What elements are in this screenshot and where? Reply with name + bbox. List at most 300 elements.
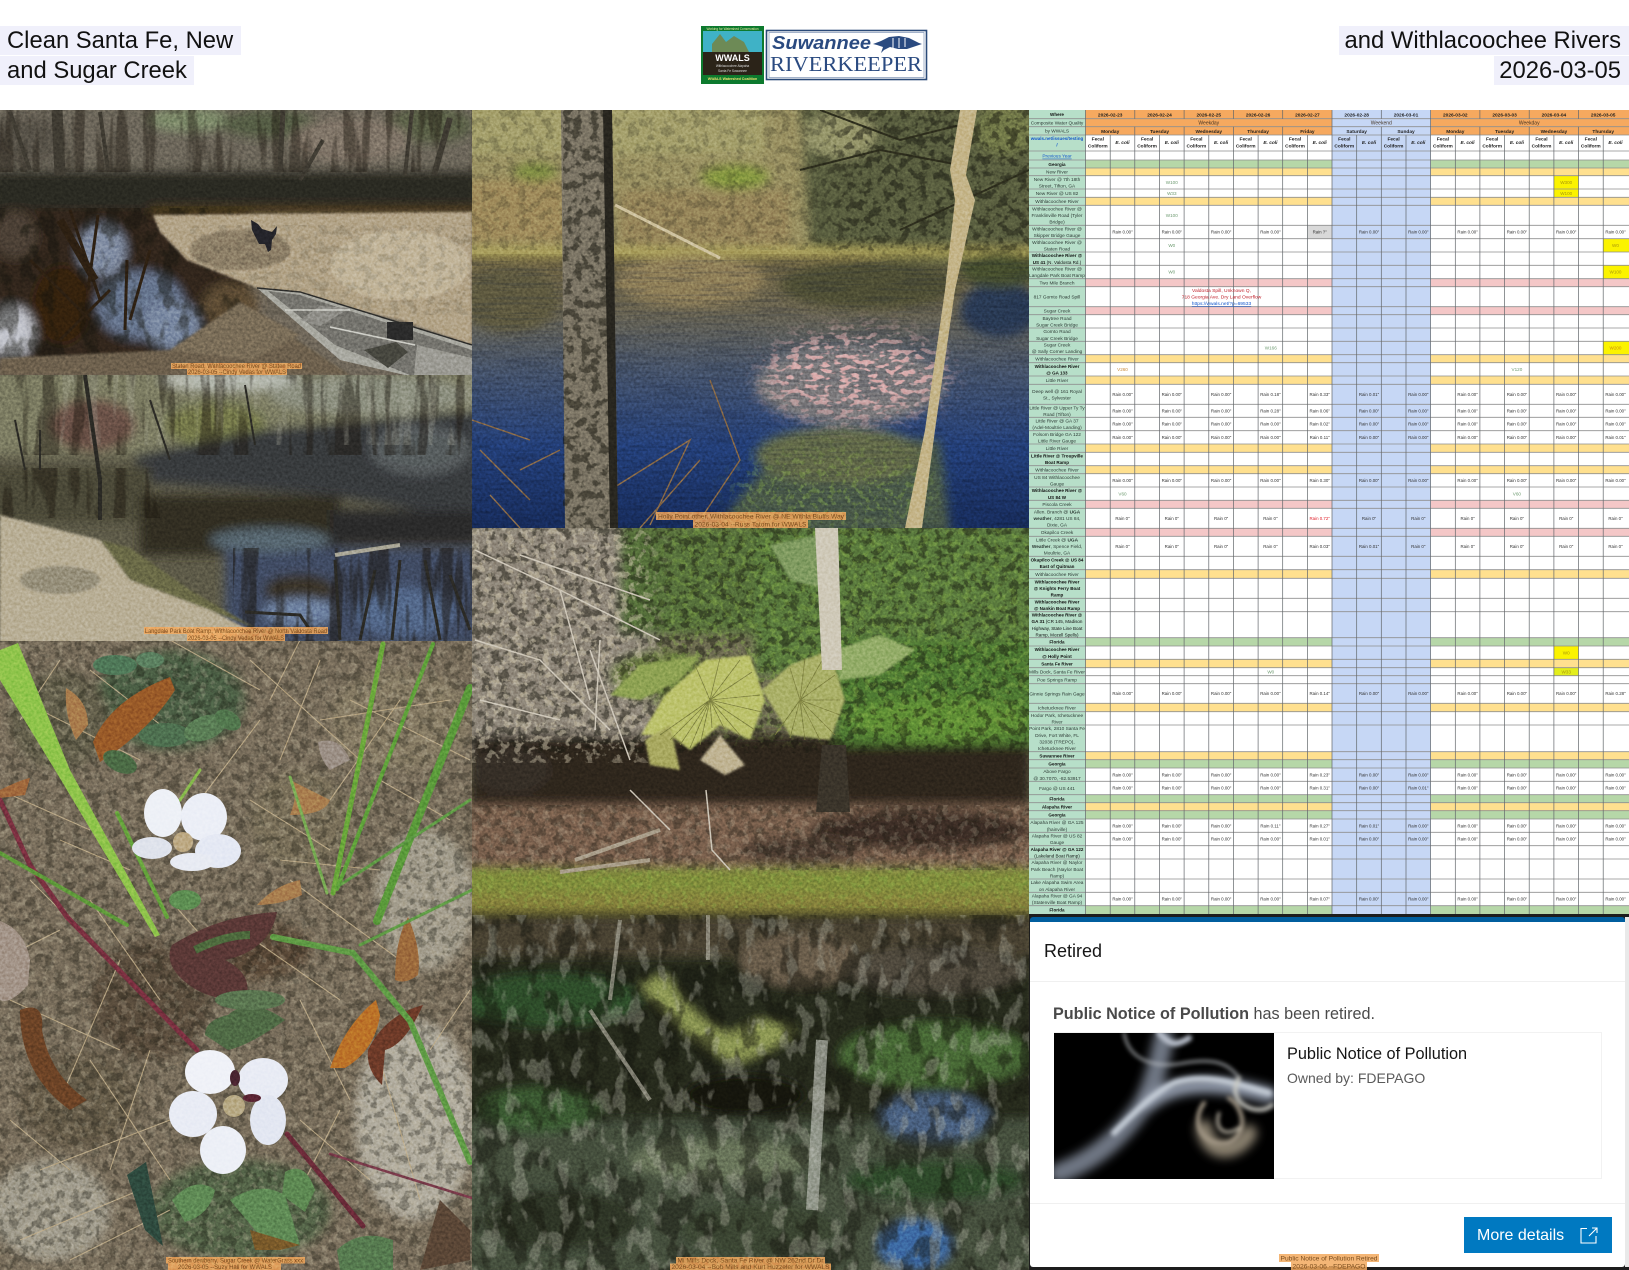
table rain readings: Rain 0.00" <box>1457 408 1478 413</box>
table header: Fecal <box>1585 137 1597 142</box>
table rain readings: Rain 0.00" <box>1605 230 1626 235</box>
header: left title: Clean Santa Fe, New <box>7 27 233 54</box>
table rain readings: Rain 0.00" <box>1112 786 1133 791</box>
table rain readings: Rain 0.00" <box>1211 691 1232 696</box>
caption: Public Notice of Pollution Retired <box>1279 1254 1379 1270</box>
table rain readings: Rain 0.00" <box>1556 422 1577 427</box>
table header: E. coli <box>1510 140 1525 146</box>
table water-quality values: W200 <box>1609 346 1622 351</box>
table site labels: Withlacoochee River <box>1035 356 1079 362</box>
table header: Fecal <box>1190 137 1203 142</box>
button: More details <box>1464 1217 1612 1253</box>
table rain readings: Rain 0.00" <box>1162 823 1182 828</box>
table rain readings: Rain 0.31" <box>1310 786 1330 791</box>
table rain readings: Rain 0.01" <box>1310 837 1330 842</box>
table rain readings: Rain 0.00" <box>1605 786 1626 791</box>
table site labels: Deep well @ 161 Royal <box>1032 390 1082 395</box>
table rain readings: Rain 0.00" <box>1260 897 1281 902</box>
table site labels: Sugar Creek Bridge <box>1036 336 1078 342</box>
table site labels: Santa Fe River <box>1041 661 1073 666</box>
table header: Weekday <box>1198 120 1220 126</box>
table rain readings: Rain 0.00" <box>1112 408 1133 413</box>
table rain readings: Rain 0.00" <box>1507 772 1528 777</box>
table rain readings: Rain 0.00" <box>1556 691 1577 696</box>
table rain readings: Rain 0.00" <box>1211 786 1232 791</box>
table site labels: Withlacoochee River @ <box>1032 268 1082 272</box>
logo: Suwannee Riverkeeper <box>766 30 926 80</box>
table rain readings: Rain 0.00" <box>1112 422 1133 427</box>
table rain readings: Rain 0.00" <box>1605 408 1626 413</box>
table site labels: Withlacoochee River @ <box>1032 228 1082 232</box>
table header: Thursday <box>1592 129 1614 135</box>
table header: Fecal <box>1338 137 1350 142</box>
table site labels: Withlacoochee River <box>1035 647 1079 652</box>
table header: E. coli <box>1411 140 1426 146</box>
table rain readings: Rain 0.00" <box>1556 230 1577 235</box>
table header: Fecal <box>1387 137 1400 142</box>
table rain readings: Rain ?" <box>1313 230 1327 235</box>
table site labels: US 84 W <box>1048 495 1067 500</box>
table header: Coliform <box>1187 143 1206 149</box>
table rain readings: Rain 0.00" <box>1162 478 1182 483</box>
button: More details: More details <box>1477 1227 1564 1244</box>
table site labels: Withlacoochee River <box>1035 199 1079 205</box>
table rain readings: Rain 0" <box>1608 516 1623 521</box>
table bands <box>1086 160 1629 914</box>
table rain readings: Rain 0.00" <box>1408 435 1429 440</box>
header: left title <box>0 26 241 85</box>
table site labels: Little River <box>1046 378 1069 384</box>
table rain readings: Rain 0.00" <box>1457 230 1478 235</box>
table site labels: Ichetucknee River <box>1038 705 1076 711</box>
table header: 2026-03-04 <box>1542 112 1566 118</box>
logo: WWALS: WWALS <box>715 53 750 63</box>
table rain readings: Rain 0.00" <box>1408 408 1429 413</box>
table site labels: weather, 4281 US 84, <box>1033 517 1081 522</box>
table rain readings: Rain 0.00" <box>1507 478 1528 483</box>
table rain readings: Rain 0.01" <box>1605 435 1626 440</box>
photo: Staten Road river bend with dog and canoe <box>0 105 480 375</box>
table rain readings: Rain 0.00" <box>1507 408 1528 413</box>
table header: Coliform <box>1482 143 1502 149</box>
table site labels: Park Beach (Naylor Boat <box>1031 867 1084 873</box>
caption: Staten Road <box>171 363 302 376</box>
table rain readings: Rain 0.28" <box>1260 408 1281 413</box>
litter texture <box>0 641 472 1270</box>
table header: Sunday <box>1397 129 1415 135</box>
table site labels: @ GA 133 <box>1046 371 1068 376</box>
table site labels: Ramp, Mozell Spells) <box>1036 633 1079 638</box>
table header: Coliform <box>1236 143 1256 149</box>
table site labels: Boat Ramp <box>1045 460 1069 465</box>
table header: E. coli <box>1313 140 1327 146</box>
table site labels: Ichetucknee River <box>1038 746 1076 752</box>
table rain readings: Rain 0.00" <box>1359 230 1380 235</box>
table site labels: Withlacoochee River @ <box>1032 612 1082 618</box>
table rain readings: Rain 0.00" <box>1556 897 1577 902</box>
table spill note: 718 Georgia Ave. Dry Land Overflow <box>1182 294 1262 300</box>
table rain readings: Rain 0.00" <box>1260 230 1281 235</box>
caption: Staten Road: 2026-03-05 --Cindy Vedas for WWALS <box>188 369 286 376</box>
table water-quality values: V260 <box>1117 367 1128 372</box>
photo: Langdale Park Boat Ramp <box>0 370 480 648</box>
table rain readings: Rain 0" <box>1165 516 1179 521</box>
table rain readings: Rain 0.00" <box>1408 691 1429 696</box>
logo: Suwannee Riverkeeper: RIVERKEEPER <box>770 52 922 76</box>
caption: Mills Dock: Mi Mills Dock, Santa Fe River @ NW 262nd Dr Dr <box>678 1258 824 1265</box>
table header: Fecal <box>1240 137 1252 142</box>
table header: Coliform <box>1384 143 1403 149</box>
table rain readings: Rain 0.00" <box>1162 772 1182 777</box>
panel: Retired notice modal <box>1029 914 1629 1270</box>
table site labels: Suwannee River <box>1039 754 1075 758</box>
table site labels: Little River @ GA 37 <box>1035 420 1079 424</box>
flower: lower <box>169 1050 288 1174</box>
card owner: Owned by: FDEPAGO <box>1287 1070 1425 1086</box>
table rain readings: Rain 0.07" <box>1310 897 1330 902</box>
pine needles <box>0 640 470 1260</box>
table site labels: New River @ US 82 <box>1036 191 1079 197</box>
table rain readings: Rain 0.00" <box>1556 837 1577 842</box>
table rain readings: Rain 0.00" <box>1211 772 1232 777</box>
table site labels: Little River @ Troupville <box>1031 454 1083 458</box>
table rain readings: Rain 0.00" <box>1162 392 1182 397</box>
table site labels: Little River <box>1046 446 1069 452</box>
photo: Southern dewberry flowers <box>0 640 475 1270</box>
header: right title: 2026-03-05 <box>1499 57 1621 84</box>
table water-quality values: W0 <box>1612 243 1619 248</box>
table site labels: River <box>1051 720 1063 726</box>
table header: wwals.net/issues/testing <box>1031 136 1083 141</box>
header: left title: and Sugar Creek <box>7 57 187 84</box>
table rain readings: Rain 0.00" <box>1408 837 1429 842</box>
table site labels: Franklinville Road (Tyler <box>1032 213 1083 219</box>
table rain readings: Rain 0.00" <box>1457 823 1478 828</box>
table spill note: https://wwals.net/?p=69533 <box>1192 301 1251 307</box>
table rain readings: Rain 0.00" <box>1162 408 1182 413</box>
logo: WWALS: Working for Watershed Conservation <box>706 27 759 31</box>
table site labels: (Adel-Moultrie Landing) <box>1032 425 1082 431</box>
table site labels: (hainville) <box>1047 827 1068 833</box>
table rain readings: Rain 0.00" <box>1507 823 1528 828</box>
table site labels: Mills Dock, Santa Fe River <box>1029 670 1085 676</box>
table site labels: Two Mile Branch <box>1039 280 1075 286</box>
table header: Weekday <box>1519 120 1540 126</box>
table header: Coliform <box>1137 143 1157 149</box>
table site labels: Street, Tifton, GA <box>1039 184 1076 190</box>
table rain readings: Rain 0.00" <box>1260 837 1281 842</box>
table header: E. coli <box>1263 140 1278 146</box>
table site labels: Allen. Branch @ UGA <box>1034 510 1080 515</box>
table rain readings: Rain 0.00" <box>1211 230 1232 235</box>
water quality table <box>1029 110 1629 915</box>
table rain readings: Rain 0.00" <box>1211 408 1232 413</box>
table header: E. coli <box>1115 140 1130 146</box>
table site labels: Baytree Road <box>1042 317 1072 322</box>
table site labels: Alapaha River @ Naylor <box>1031 861 1083 866</box>
table rain readings: Rain 0.00" <box>1359 478 1380 483</box>
caption: Holly Point: Holly Point other, Withlacoochee River @ NE Withla Bluffs Way <box>658 513 845 520</box>
table header: Previous Year <box>1042 154 1072 160</box>
table water-quality values: W33 <box>1561 669 1571 674</box>
table rain readings: Rain 0.00" <box>1359 897 1380 902</box>
table rain readings: Rain 0.00" <box>1507 230 1528 235</box>
table rain readings: Rain 0.11" <box>1310 435 1330 440</box>
palm fronds <box>610 535 915 775</box>
caption: Holly Point: 2026-03-04 --Russ Tatom for WWALS <box>694 521 806 528</box>
table site labels: Withlacoochee River <box>1035 468 1079 474</box>
table site labels: Drive, Fort White, FL <box>1035 733 1079 739</box>
table header: 2026-02-28 <box>1344 112 1369 118</box>
table rain readings: Rain 0.00" <box>1162 422 1182 427</box>
table header: Fecal <box>1535 137 1548 142</box>
table rain readings: Rain 0.00" <box>1457 392 1478 397</box>
logo: WWALS: Withlacoochee Alapaha <box>716 64 749 68</box>
card thumbnail: smoke <box>1054 1033 1274 1179</box>
table rain readings: Rain 0" <box>1115 544 1130 549</box>
table site labels: East of Quitman <box>1040 564 1075 569</box>
table rain readings: Rain 0.00" <box>1260 691 1281 696</box>
table site labels: @ Nankin Boat Ramp <box>1034 606 1080 611</box>
table rain readings: Rain 0.00" <box>1359 408 1380 413</box>
table header: Fecal <box>1141 137 1153 142</box>
table site labels: Road (Tifton) <box>1043 412 1071 418</box>
table site labels: Alapaha River @ GA 122 <box>1031 847 1083 852</box>
table rain readings: Rain 0.00" <box>1260 422 1281 427</box>
table site labels: Alapaha River <box>1042 804 1072 810</box>
table header: Monday <box>1446 129 1465 135</box>
table site labels: Ginnie Springs Rain Gage <box>1029 691 1085 697</box>
sand texture <box>190 225 472 315</box>
table rain readings: Rain 0.00" <box>1359 422 1380 427</box>
table site labels: Withlacoochee River @ <box>1032 488 1082 493</box>
table site labels: New River @ 7th 18th <box>1034 178 1080 183</box>
table water-quality values: W100 <box>1560 191 1573 196</box>
table header: Wednesday <box>1196 129 1222 135</box>
table site labels: New River <box>1046 170 1068 176</box>
table site labels: US 41 (N. Valdosta Rd.) <box>1033 260 1081 265</box>
table rain readings: Rain 0.00" <box>1408 897 1429 902</box>
table water-quality values: W100 <box>1166 180 1178 185</box>
table water-quality values: W0 <box>1563 650 1570 655</box>
table rain readings: Rain 0.00" <box>1408 478 1429 483</box>
table header: Friday <box>1300 129 1315 135</box>
table rain readings: Rain 0.00" <box>1211 435 1232 440</box>
table header: Thursday <box>1247 129 1269 135</box>
logo: WWALS: Santa Fe Suwannee <box>718 69 747 73</box>
table rain readings: Rain 0.00" <box>1211 897 1232 902</box>
table rain readings: Rain 0.00" <box>1112 435 1133 440</box>
table site labels: Sugar Creek <box>1044 308 1071 314</box>
table header: Composite Water Quality <box>1031 120 1084 126</box>
table water-quality values: W100 <box>1166 213 1178 218</box>
table site labels: Poe Springs Ramp <box>1037 678 1077 684</box>
table header: 2026-02-24 <box>1147 112 1172 118</box>
table header: E. coli <box>1559 140 1574 146</box>
table header: E. coli <box>1461 140 1475 146</box>
table rain readings: Rain 0.00" <box>1605 897 1626 902</box>
table site labels: GA 31 (CR 145, Madison <box>1032 619 1082 624</box>
table rain readings: Rain 0.00" <box>1211 392 1232 397</box>
table header: Fecal <box>1486 137 1498 142</box>
photo: Mills Dock palms and reflection <box>460 524 1035 1270</box>
table rain readings: Rain 0.00" <box>1211 422 1232 427</box>
table water-quality values <box>1117 180 1622 674</box>
table water-quality values: W0 <box>1168 270 1176 275</box>
table site labels: Florida <box>1049 796 1065 802</box>
table site labels: Okapilco Creek @ US 84 <box>1031 558 1083 562</box>
table rain readings: Rain 0.11" <box>1260 823 1281 828</box>
table rain readings: Rain 0.02" <box>1310 422 1330 427</box>
table rain readings: Rain 0.00" <box>1507 837 1528 842</box>
table site labels: Piscola Creek <box>1042 502 1072 508</box>
table rain readings: Rain 0.00" <box>1507 435 1528 440</box>
table header: 2026-03-01 <box>1394 112 1419 118</box>
table rain readings <box>1112 230 1626 902</box>
table site labels: Bridge) <box>1049 220 1065 226</box>
table header <box>1030 112 1623 160</box>
table rain readings: Rain 0" <box>1411 516 1426 521</box>
table rain readings: Rain 0.72" <box>1310 516 1330 521</box>
table site labels: Point Park, 2810 Santa Fe <box>1029 727 1085 732</box>
table header: 2026-02-23 <box>1098 112 1123 118</box>
table rain readings: Rain 0.00" <box>1457 897 1478 902</box>
table rain readings: Rain 0.00" <box>1556 435 1577 440</box>
table site labels: Withlacoochee River @ <box>1032 241 1082 246</box>
item card <box>1054 1032 1602 1179</box>
table rain readings: Rain 0.00" <box>1260 478 1281 483</box>
table rain readings: Rain 0.00" <box>1457 772 1478 777</box>
table rain readings: Rain 0.00" <box>1162 230 1182 235</box>
logos <box>701 26 928 84</box>
table rain readings: Rain 0.00" <box>1457 422 1478 427</box>
table header: Weekend <box>1371 120 1392 126</box>
table rain readings: Rain 0.00" <box>1162 435 1182 440</box>
caption: Staten Road: Staten Road, Withlacoochee River @ Staten Road <box>172 363 301 370</box>
table rain readings: Rain 0.00" <box>1408 230 1429 235</box>
table site labels: Alapaha River @ GA 125 <box>1030 821 1084 826</box>
table rain readings: Rain 0.00" <box>1408 392 1429 397</box>
table rain readings: Rain 0.00" <box>1457 435 1478 440</box>
table site labels: Withlacoochee River @ <box>1032 207 1082 212</box>
table rain readings: Rain 0.27" <box>1310 823 1330 828</box>
table rain readings: Rain 0.00" <box>1457 837 1478 842</box>
table rain readings: Rain 0" <box>1559 516 1574 521</box>
table rain readings: Rain 0" <box>1214 516 1229 521</box>
table rain readings: Rain 0.00" <box>1556 478 1577 483</box>
table water-quality values: W0 <box>1267 669 1275 674</box>
table rain readings: Rain 0" <box>1165 544 1179 549</box>
table rain readings: Rain 0.00" <box>1359 786 1380 791</box>
table rain readings: Rain 0.06" <box>1310 408 1330 413</box>
table header: Monday <box>1101 129 1120 135</box>
table rain readings: Rain 0.00" <box>1112 772 1133 777</box>
table rain readings: Rain 0.00" <box>1408 422 1429 427</box>
table site labels: Alapaha River @ GA 94 <box>1032 894 1082 900</box>
table site labels: (Statenville Boat Ramp) <box>1032 900 1082 906</box>
caption: Langdale Park Boat Ramp: 2026-03-05 --Cindy Vedas for WWALS <box>188 635 284 642</box>
canoe <box>257 288 472 375</box>
table water-quality values: W33 <box>1167 191 1177 196</box>
table rain readings: Rain 0" <box>1510 516 1524 521</box>
pink blossoms <box>745 313 964 438</box>
table rain readings: Rain 0" <box>1460 544 1475 549</box>
table rain readings: Rain 0" <box>1362 516 1377 521</box>
table water-quality values: W0 <box>1168 243 1176 248</box>
table rain readings: Rain 0.00" <box>1605 772 1626 777</box>
table header: 2026-02-26 <box>1246 112 1271 118</box>
table site labels: Skipper Bridge Gauge <box>1034 233 1081 239</box>
table rain readings: Rain 0.00" <box>1162 786 1182 791</box>
table header: Coliform <box>1334 143 1354 149</box>
table site labels: Hodor Park, Ichetucknee <box>1031 714 1083 719</box>
table site labels: Sugar Creek Bridge <box>1036 323 1078 329</box>
table site labels: Sugar Creek <box>1044 344 1070 348</box>
table site labels: Ramp <box>1051 593 1064 598</box>
table header: Wednesday <box>1541 129 1568 135</box>
logo: WWALS: WWALS Watershed Coalition <box>708 77 757 81</box>
table rain readings: Rain 0.00" <box>1112 691 1133 696</box>
table rain readings: Rain 0" <box>1559 544 1574 549</box>
table site labels: Georgia <box>1048 162 1066 167</box>
table water-quality values: W300 <box>1560 180 1573 185</box>
table rain readings: Rain 0.18" <box>1260 392 1281 397</box>
table rain readings: Rain 0.00" <box>1112 392 1133 397</box>
table site labels: Withlacoochee River <box>1035 572 1079 578</box>
table site labels: Ramp) <box>1050 873 1065 879</box>
table rain readings: Rain 0.00" <box>1260 435 1281 440</box>
table rain readings: Rain 0.00" <box>1359 837 1380 842</box>
table site labels: @ Knights Ferry Boat <box>1034 586 1081 591</box>
photo texture <box>0 110 1029 1270</box>
table rain readings: Rain 0.00" <box>1112 823 1133 828</box>
table rain readings: Rain 0.00" <box>1507 422 1528 427</box>
table rain readings: Rain 0" <box>1263 516 1278 521</box>
table water-quality values: W166 <box>1265 346 1277 351</box>
table rain readings: Rain 0.00" <box>1507 392 1528 397</box>
table header: E. coli <box>1608 140 1623 146</box>
table header: by WWALS <box>1045 129 1069 135</box>
table header: Fecal <box>1437 137 1449 142</box>
table rain readings: Rain 0.00" <box>1457 691 1478 696</box>
table water-quality values: V60 <box>1513 491 1521 496</box>
table site labels: Withlacoochee River @ <box>1032 253 1082 258</box>
table header: Fecal <box>1289 137 1301 142</box>
table rain readings: Rain 0.00" <box>1211 823 1232 828</box>
table rain readings: Rain 0.28" <box>1605 691 1626 696</box>
table rain readings: Rain 0.00" <box>1605 392 1626 397</box>
dog <box>251 220 277 252</box>
table header: E. coli <box>1165 140 1180 146</box>
table header: Coliform <box>1285 143 1305 149</box>
forest and reflection texture <box>0 375 472 455</box>
table rain readings: Rain 0.00" <box>1605 478 1626 483</box>
table site labels: Florida <box>1049 640 1065 645</box>
table rain readings: Rain 0.00" <box>1408 772 1429 777</box>
table header: Coliform <box>1088 143 1108 149</box>
table rain readings: Rain 0.30" <box>1310 478 1330 483</box>
table site labels: Withlacoochee River <box>1035 579 1079 584</box>
table rain readings: Rain 0.00" <box>1211 837 1232 842</box>
table rain readings: Rain 0.23" <box>1310 772 1330 777</box>
table rain readings: Rain 0.00" <box>1457 786 1478 791</box>
table rain readings: Rain 0.00" <box>1605 422 1626 427</box>
table site labels: Alapaha River @ US 82 <box>1032 834 1082 840</box>
table rain readings: Rain 0.00" <box>1408 823 1429 828</box>
table rain readings: Rain 0.00" <box>1211 478 1232 483</box>
modal message: Public Notice of Pollution has been retired. <box>1053 1005 1375 1023</box>
table header: Tuesday <box>1495 129 1514 135</box>
